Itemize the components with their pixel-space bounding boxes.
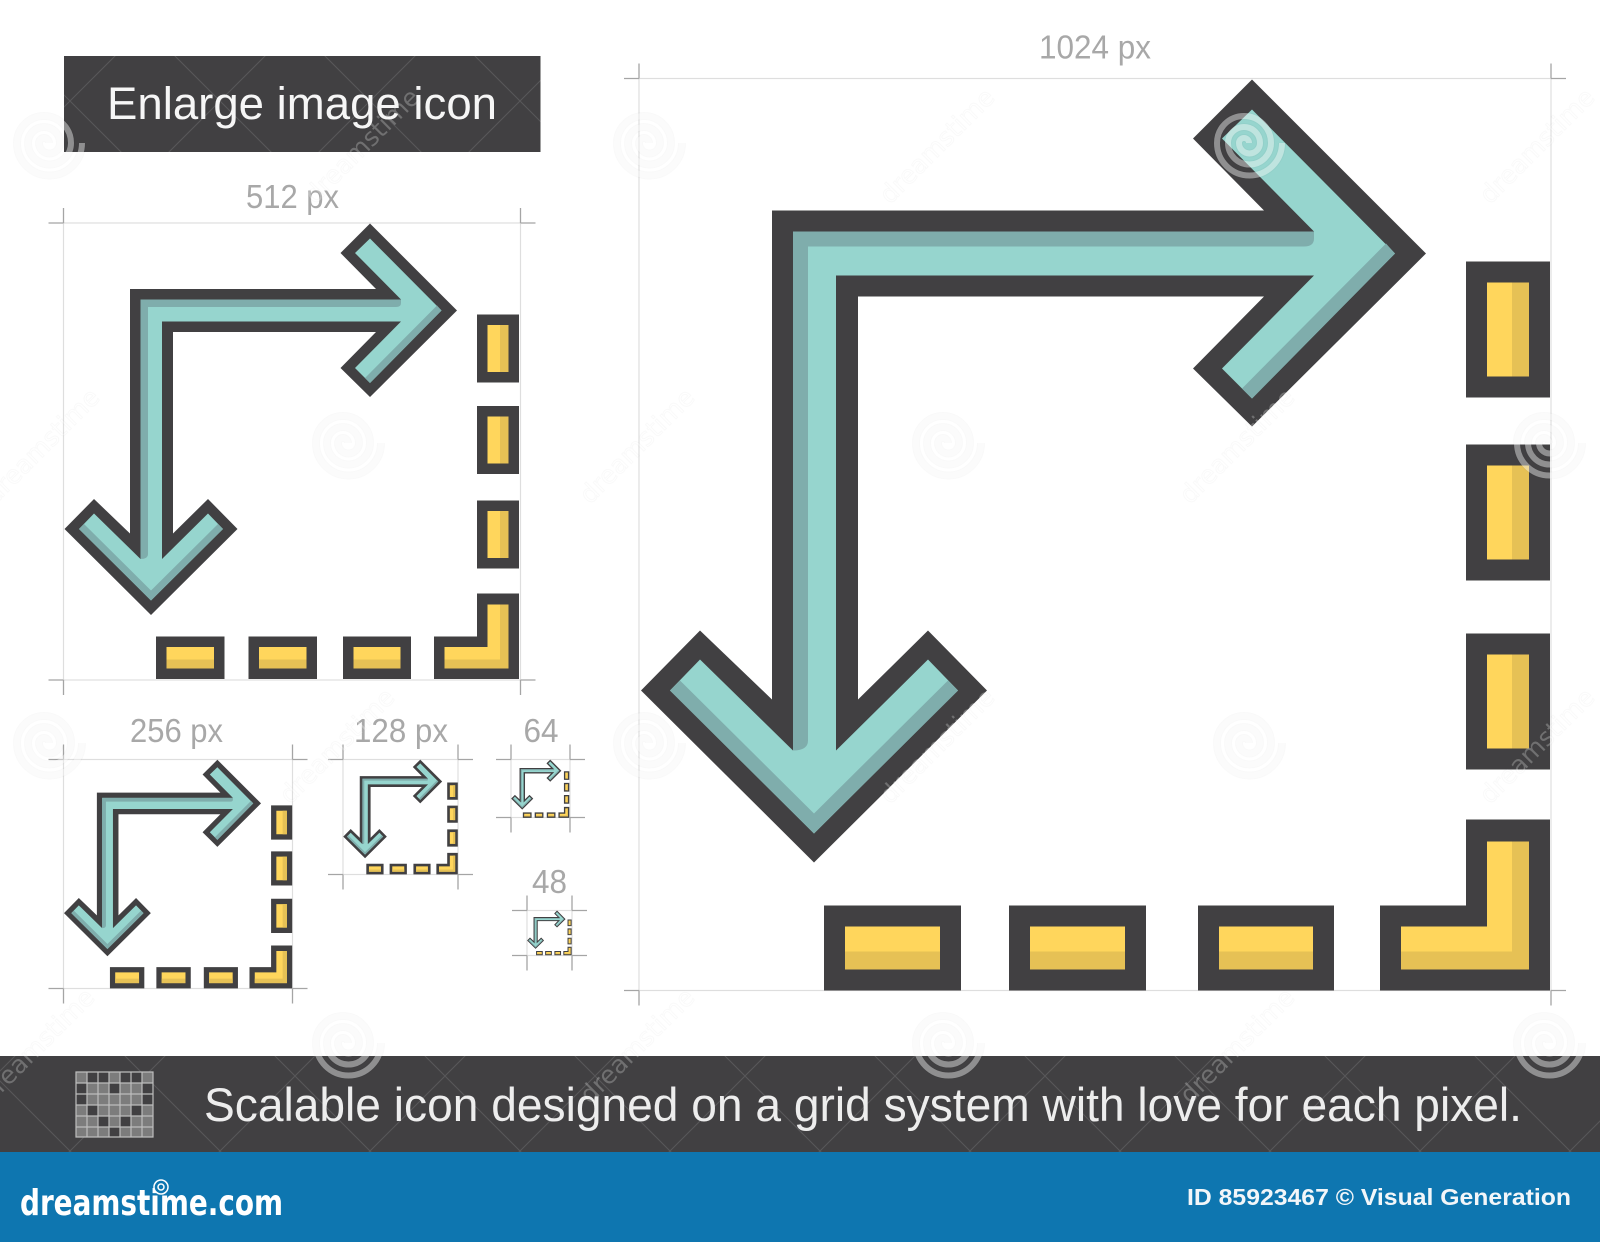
footer bar [0,1152,1600,1242]
icon: enlarge arrows 64 [511,760,569,818]
icon: enlarge arrows 1024 [641,80,1550,990]
title text: Enlarge image icon [107,78,497,129]
size label: 128 px: 128 px [354,712,448,749]
watermarks: dreamstime [574,983,700,1109]
size label: 1024 px: 1024 px [1039,28,1151,66]
icon panel: 64 px [496,712,585,832]
icon: enlarge arrows 128 [343,760,458,874]
size label: 256 px: 256 px [130,712,223,749]
icon panel: 512 px [48,178,536,695]
watermarks: dreamstime [874,683,1000,809]
icon panel: 128 px [328,712,473,890]
caption text: Scalable icon designed on a grid system with love for each pixel. [204,1078,1522,1131]
icon: enlarge arrows 256 [64,760,292,988]
size label: 64: 64 [524,712,558,749]
icon: enlarge arrows 48 [527,911,572,955]
title banner [64,56,540,152]
dreamstime logo: dreamstime.com [20,1183,283,1224]
icon panel: 48 px [512,863,587,970]
watermarks: dreamstime [274,683,400,809]
size label: 512 px: 512 px [246,178,339,215]
icon panel: 256 px [48,712,308,1004]
watermarks: dreamstime [1474,683,1600,809]
icon: enlarge arrows 512 [64,224,519,679]
watermarks: dreamstime [1174,383,1300,509]
watermarks: dreamstime [1174,983,1300,1109]
watermarks: dreamstime [874,83,1000,209]
caption bar [0,1056,1600,1152]
icon: grid [76,1072,153,1137]
watermarks: dreamstime [299,83,425,209]
size label: 48: 48 [532,863,567,900]
image id and credit: ID 85923467 © Visual Generation [1187,1184,1571,1210]
watermarks: dreamstime [1474,83,1600,209]
watermarks: dreamstime [574,383,700,509]
